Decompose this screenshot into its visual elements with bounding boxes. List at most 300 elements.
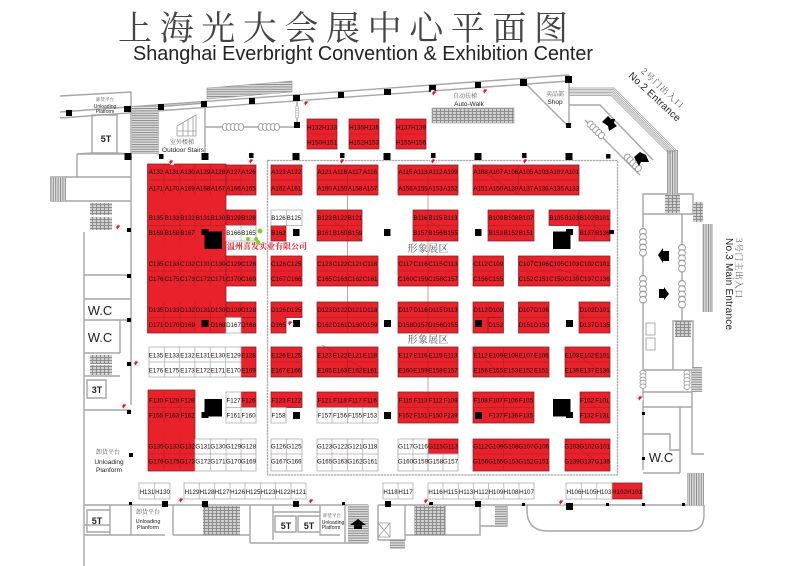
booth labels: row E: E102: [580, 352, 595, 360]
booth labels: row C: C129: [226, 261, 241, 268]
booth labels: row F: F105: [519, 398, 534, 404]
booth labels: row B lower: B165: [241, 230, 256, 237]
booth labels: row G: G113: [443, 444, 458, 450]
booth labels: row G: G122: [332, 444, 348, 450]
booth labels: row D lower: D155: [443, 322, 458, 329]
booth labels: row A lower: A135: [549, 186, 564, 192]
booth labels: row A lower: A162: [271, 186, 286, 192]
booth labels: row C: C106: [534, 261, 549, 268]
entrance label: No.3: No.3 Main Entrance: [723, 238, 734, 330]
booth labels: row D lower: D151: [519, 322, 534, 329]
booth labels: row B: B131: [196, 215, 211, 222]
booth labels: row C: C125: [287, 261, 302, 268]
booth labels: row E lower: E151: [534, 368, 549, 374]
booth labels: row C lower: C176: [149, 276, 164, 283]
booth labels: row F lower: F150: [428, 412, 443, 420]
booth labels: row B: B122: [333, 215, 348, 222]
booth labels: row D: D129: [226, 307, 241, 314]
booth labels: row G: G118: [363, 444, 378, 450]
booth labels: row D: D107: [519, 307, 534, 314]
booth labels: row A: A113: [414, 169, 428, 176]
booth labels: row F: F117: [348, 398, 362, 404]
booth labels: row F: F112: [429, 398, 443, 404]
booth labels: row E lower: E175: [165, 368, 180, 374]
booth labels: row G lower: G166: [286, 458, 302, 466]
booth labels: row D lower: D171: [149, 322, 164, 329]
booth labels: row G: G107: [518, 444, 534, 450]
booth labels: row D lower: D165: [271, 322, 286, 329]
booth labels: row G lower: G173: [180, 458, 196, 466]
room and facility labels: Unloading: [94, 104, 116, 110]
booth labels: row B: B115: [428, 215, 443, 222]
booth labels: row D lower: D159: [363, 322, 378, 329]
booth labels: row C: C109: [488, 261, 504, 268]
room and facility labels: 室外楼梯: [170, 137, 194, 146]
booth labels: row E lower: E166: [287, 368, 302, 374]
booth labels: bottom H row: H129: [185, 489, 200, 496]
booth labels: row G: G123: [317, 444, 333, 450]
booth labels: row D: D109: [488, 307, 504, 314]
booth labels: bottom H row: H123: [261, 489, 276, 496]
booth labels: row G lower: G162: [347, 458, 363, 466]
booth labels: row F lower: F131: [595, 412, 610, 420]
booth labels: row C: C107: [519, 261, 534, 268]
booth labels: row A: A132: [149, 169, 164, 176]
booth labels: row C lower: C157: [443, 276, 458, 283]
booth labels: row D: D101: [595, 307, 610, 314]
booth labels: row E lower: E136: [595, 368, 610, 374]
booth labels: row E: E117: [398, 352, 413, 360]
booth labels: row C lower: C151: [534, 276, 549, 283]
booth labels: row E lower: E173: [180, 368, 195, 374]
booth labels: row E lower: E176: [149, 368, 164, 374]
booth labels: row A lower: A157: [363, 186, 378, 192]
booth labels: row C: C121: [348, 261, 363, 268]
booth labels: bottom H row: H107: [519, 489, 534, 496]
booth labels: row E lower: E170: [226, 368, 241, 374]
booth labels: row A lower: A155: [413, 186, 428, 192]
booth labels: row E lower: E139: [565, 368, 580, 374]
booth labels: row G: G130: [210, 444, 226, 450]
booth labels: row A lower: A160: [317, 186, 332, 192]
booth labels: top H row lower: H155: [396, 140, 411, 146]
booth labels: row A lower: A151: [473, 186, 488, 192]
booth labels: row C lower: C155: [488, 276, 504, 283]
arrow: No.2 entrance inner: [634, 152, 649, 166]
booth labels: row F lower: F132: [580, 412, 595, 420]
booth labels: row D: D123: [317, 307, 333, 314]
booth labels: bottom H row: H115: [443, 489, 458, 496]
booth labels: row B: B102: [580, 215, 595, 222]
booth labels: row E lower: E155: [489, 368, 504, 374]
booth labels: row F: F116: [363, 398, 377, 404]
booth labels: row D lower: D135: [595, 322, 610, 329]
booth labels: row G: G109: [488, 444, 504, 450]
booth labels: row A lower: A171: [149, 186, 164, 192]
title: Chinese: 上海光大会展中心平面图: [118, 1, 568, 50]
booth labels: row A: A122: [287, 169, 302, 176]
booth labels: row A lower: A150: [489, 186, 504, 192]
booth labels: row C: C130: [211, 261, 226, 268]
booth labels: row G lower: G170: [226, 458, 242, 466]
booth labels: row C: C113: [443, 261, 458, 268]
booth labels: bottom H row: H131: [140, 489, 155, 496]
booth labels: row G: G115: [428, 444, 443, 450]
booth labels: row B: B113: [444, 215, 458, 222]
room and facility labels: Auto-Walk: [454, 101, 485, 108]
booth labels: row E lower: E171: [211, 368, 226, 374]
booth labels: row F lower: F155: [149, 412, 164, 420]
booth labels: row A: A126: [241, 169, 256, 176]
booth labels: row G lower: G155: [488, 458, 504, 466]
booth labels: row F: F128: [180, 398, 195, 404]
booth labels: row F lower: F151: [413, 412, 428, 420]
image display area labels: 形象展区: [408, 240, 448, 255]
booth labels: row E: E122: [333, 352, 348, 360]
booth labels: row C lower: C175: [165, 276, 180, 283]
booth labels: bottom H row: H130: [155, 489, 170, 496]
booth labels: row C lower: C150: [549, 276, 565, 283]
booth labels: row C lower: C161: [363, 276, 378, 283]
booth labels: row C: C135: [149, 261, 164, 268]
booth labels: row C: C115: [428, 261, 443, 268]
booth labels: row B: B105: [549, 215, 564, 222]
booth labels: row C lower: C162: [348, 276, 363, 283]
booth labels: row D lower: D152: [488, 322, 504, 329]
booth labels: row E: E101: [595, 352, 610, 360]
booth labels: row A: A123: [271, 169, 286, 176]
entrance label: No.2: 2号门出入口: [638, 65, 686, 111]
booth labels: row C: C118: [363, 261, 378, 268]
booth labels: row C lower: C166: [287, 276, 302, 283]
room and facility labels: Planform: [96, 467, 122, 474]
booth labels: row D lower: D157: [413, 322, 428, 329]
booth labels: row C lower: C160: [398, 276, 413, 283]
booth labels: row G lower: G137: [579, 458, 595, 466]
booth labels: bottom H row: H108: [504, 489, 519, 496]
booth labels: row E lower: E167: [271, 368, 286, 374]
booth labels: row A lower: A166: [226, 186, 241, 192]
room and facility labels: 卸货平台: [96, 447, 120, 456]
booth labels: row A lower: A133: [565, 186, 580, 192]
booth labels: row D: D128: [241, 307, 256, 314]
booth labels: row B lower: B161: [317, 230, 332, 237]
room and facility labels: 5T: [304, 521, 315, 531]
booth labels: row B lower: B157: [413, 230, 428, 237]
arrow: bottom stairs: [350, 519, 366, 529]
room and facility labels: W.C: [88, 330, 112, 345]
booth labels: bottom H row: H121: [291, 489, 306, 496]
booth labels: top H row lower: H152: [349, 140, 364, 146]
image display area labels: [408, 240, 448, 346]
booth labels: row G lower: G171: [210, 458, 226, 466]
booth labels: row F lower: F139: [443, 412, 458, 420]
booth labels: row G lower: G169: [241, 458, 257, 466]
booth labels: row F: F121: [318, 398, 332, 404]
booth labels: row E: E108: [504, 352, 519, 360]
booth labels: row D: D118: [363, 307, 378, 314]
booth labels: top H row: H136: [364, 124, 379, 132]
booth labels: row E: E130: [211, 352, 226, 360]
booth labels: row E lower: E159: [413, 368, 428, 374]
booth labels: row D lower: D161: [333, 322, 348, 329]
booth labels: row F: F102: [580, 398, 595, 404]
highlighted company label: 温州喜发实业有限公司: [227, 241, 307, 252]
booth labels: row E: E135: [149, 352, 164, 360]
booth labels: row F lower: F161: [226, 412, 241, 420]
booth labels: row B: B103: [565, 215, 580, 222]
booth labels: row B lower: B152: [504, 230, 519, 237]
booth labels: row F lower: F135: [519, 412, 534, 420]
booth labels: row G: G132: [180, 444, 196, 450]
booth labels: row G: G135: [148, 444, 164, 450]
booth labels: row A: A116: [363, 169, 378, 176]
booth labels: row A lower: A161: [287, 186, 302, 192]
booth labels: row F: F113: [414, 398, 428, 404]
booth labels: row F lower: F153: [363, 412, 378, 420]
booth labels: row A: A105: [519, 169, 534, 176]
booth labels: row E: E131: [196, 352, 211, 360]
booth labels: row E: E125: [287, 352, 302, 360]
booth labels: bottom H row: H112: [474, 489, 489, 496]
room and facility labels: 3T: [92, 385, 103, 395]
booth labels: row B lower: B155: [443, 230, 458, 237]
booth labels: row E: E113: [444, 352, 458, 360]
coil doors: [222, 106, 690, 390]
booth labels: row A: A117: [348, 169, 363, 176]
booth labels: row D: D125: [287, 307, 302, 314]
room and facility labels: Unloading: [136, 519, 160, 525]
booth labels: row D: D131: [196, 307, 211, 314]
booth labels: row C lower: C171: [211, 276, 226, 283]
booth labels: row C lower: C170: [226, 276, 241, 283]
booth labels: row C lower: C163: [333, 276, 348, 283]
booth labels: row G: G102: [579, 444, 595, 450]
room and facility labels: W.C: [649, 450, 673, 465]
booth labels: row G lower: G176: [148, 458, 164, 466]
booth labels: row D: D112: [473, 307, 488, 314]
booth labels: bottom H row: H113: [459, 489, 474, 496]
booth labels: row G: G126: [271, 444, 287, 450]
booth labels: row A: A128: [211, 169, 226, 176]
elevator box: [378, 523, 390, 537]
booth labels: row C: C117: [398, 261, 413, 268]
booth labels: top H row lower: H153: [364, 140, 379, 146]
booth labels: row B: B135: [149, 215, 164, 222]
booth labels: row B: B123: [317, 215, 332, 222]
room and facility labels: Platform: [96, 109, 114, 115]
room and facility labels: Outdoor Stairs: [162, 147, 205, 154]
booth labels: row G: G121: [347, 444, 363, 450]
booth labels: row G: G101: [595, 444, 610, 450]
booth labels: row G lower: G159: [413, 458, 429, 466]
booth labels: row B: B108: [504, 215, 519, 222]
booth labels: row G lower: G172: [195, 458, 211, 466]
booth labels: row A: A112: [428, 169, 443, 176]
room and facility labels: Platform: [322, 525, 340, 531]
booth labels: row E: E115: [428, 352, 443, 360]
booth labels: top H row lower: H156: [411, 140, 426, 146]
booth labels: row G: G112: [473, 444, 488, 450]
booth labels: row A: A108: [473, 169, 488, 176]
booth labels: row F: F101: [595, 398, 610, 404]
booth labels: row D lower: D150: [534, 322, 549, 329]
booth labels: row A: A109: [443, 169, 458, 176]
booth labels: row D: D117: [398, 307, 413, 314]
booth labels: row F lower: F157: [318, 412, 332, 420]
booth labels: row F: F126: [241, 398, 256, 404]
booth labels: row F lower: F137: [489, 412, 503, 420]
booth labels: top H row lower: H151: [322, 140, 337, 146]
booth labels: row F: F106: [504, 398, 519, 404]
room and facility labels: 卖品部: [546, 89, 564, 98]
booth labels: row G: G125: [286, 444, 302, 450]
booth labels: row B lower: B156: [428, 230, 443, 237]
booth labels: row C: C101: [595, 261, 610, 268]
booth labels: row B: B133: [165, 215, 180, 222]
booth labels: row F: F123: [271, 398, 286, 404]
booth labels: row D: D135: [149, 307, 164, 314]
booth labels: row G lower: G152: [518, 458, 534, 466]
booth labels: row C: C131: [196, 261, 211, 268]
booth labels: row F lower: F162: [180, 412, 195, 420]
booth labels: bottom H row: H126: [230, 489, 245, 496]
booth labels: row F: F108: [474, 398, 488, 404]
booth labels: row E lower: E163: [333, 368, 348, 374]
booth labels: row A: A121: [317, 169, 332, 176]
booth labels: row F: F107: [489, 398, 503, 404]
booth labels: row G: G116: [413, 444, 428, 450]
booth labels: row E: E126: [271, 352, 286, 360]
booth labels: row C: C133: [165, 261, 180, 268]
booth labels: row D: D133: [165, 307, 180, 314]
booth labels: row E: E128: [241, 352, 256, 360]
booth labels: row D: D102: [580, 307, 595, 314]
booth labels: row D: D122: [333, 307, 348, 314]
booth labels: row E: E107: [519, 352, 534, 360]
booth labels: row F lower: F136: [504, 412, 519, 420]
booth labels: row G lower: G165: [317, 458, 333, 466]
booth labels: row D lower: D169: [180, 322, 195, 329]
booth labels: row B lower: B153: [489, 230, 504, 237]
booth labels: row G: G117: [398, 444, 413, 450]
booth labels: row G: G131: [195, 444, 211, 450]
booth labels: row F: F127: [226, 398, 241, 404]
booth labels: bottom H row: H125: [246, 489, 261, 496]
room and facility labels: [88, 89, 673, 531]
booth labels: bottom H row: H117: [398, 489, 413, 496]
booth labels: row G: G108: [503, 444, 519, 450]
room and facility labels: Shop: [547, 99, 563, 106]
booth labels: row E lower: E156: [473, 368, 488, 374]
booth labels: row E lower: E169: [241, 368, 256, 374]
booth labels: row G lower: G160: [398, 458, 414, 466]
booth labels: row B: B121: [348, 215, 363, 222]
booth labels: row G lower: G139: [564, 458, 580, 466]
booth labels: row C lower: C159: [413, 276, 428, 283]
booth labels: top H row: H135: [349, 124, 364, 132]
booth labels: row E: E103: [565, 352, 580, 360]
booth labels: row A: A129: [196, 169, 211, 176]
room and facility labels: Unloading: [94, 459, 124, 466]
booth labels: row F: F118: [333, 398, 347, 404]
booth labels: row C: C128: [241, 261, 256, 268]
booth labels: row A lower: A156: [398, 186, 413, 192]
booth labels: row A lower: A152: [443, 186, 458, 192]
booth labels: row B: B130: [211, 215, 226, 222]
booth labels: row C lower: C136: [595, 276, 610, 283]
red area: left large block: [148, 164, 256, 471]
booth labels: row D lower: D158: [398, 322, 413, 329]
booth labels: row C: C132: [180, 261, 195, 268]
booth labels: row E lower: E157: [443, 368, 458, 374]
booth labels: row F lower: F163: [165, 412, 180, 420]
booth labels: bottom H row: H101: [627, 489, 642, 496]
booth labels: row E: E106: [534, 352, 549, 360]
booth labels: row F: F130: [149, 398, 164, 404]
booth labels: row E lower: E137: [580, 368, 595, 374]
booth labels: row E lower: E152: [519, 368, 534, 374]
booth labels: row D lower: D168: [211, 322, 226, 329]
booth labels: row A lower: A158: [348, 186, 363, 192]
room and facility labels: 自动扶梯: [453, 91, 477, 100]
booth labels: row A lower: A153: [428, 186, 443, 192]
booth labels: row E: E116: [414, 352, 428, 360]
green location dots: [246, 228, 262, 244]
white booths: [139, 210, 612, 499]
booth labels: row D: D132: [180, 307, 195, 314]
booth labels: row B: B129: [226, 215, 241, 222]
booth labels: row D: D126: [271, 307, 286, 314]
booth labels: row F: F115: [399, 398, 413, 404]
booth labels: row E: E129: [226, 352, 241, 360]
red blocks: [271, 119, 642, 499]
booth labels: row A lower: A159: [333, 186, 348, 192]
booth labels: row B lower: B160: [333, 230, 348, 237]
title: English: Shanghai Everbright Convention & Exhibition Center: [133, 42, 593, 65]
booth labels: row A lower: A170: [165, 186, 180, 192]
booth labels: top H row: H133: [322, 124, 337, 132]
booth labels: row G lower: G158: [428, 458, 444, 466]
booth labels: row B lower: B136: [595, 230, 610, 237]
booth labels: row C lower: C169: [241, 276, 256, 283]
booth labels: row G lower: G167: [271, 458, 287, 466]
booth labels: row B: B128: [241, 215, 256, 222]
booth labels: row A: A106: [504, 169, 519, 176]
booth labels: bottom H row: H109: [489, 489, 504, 496]
booth labels: bottom H row: H116: [428, 489, 443, 496]
room and facility labels: W.C: [88, 303, 112, 318]
booth labels: row G: G103: [564, 444, 580, 450]
booth labels: row A lower: A169: [180, 186, 195, 192]
booth labels: row B lower: B159: [348, 230, 363, 237]
booth labels: row E lower: E161: [363, 368, 378, 374]
title: [118, 1, 593, 65]
booth labels: row E lower: E172: [196, 368, 211, 374]
booth labels: row E: E118: [363, 352, 378, 360]
booth labels: row B: B109: [489, 215, 504, 222]
booth labels: row A lower: A167: [211, 186, 226, 192]
room and facility labels: 卸货平台: [96, 96, 114, 103]
booth labels: row C lower: C156: [473, 276, 489, 283]
booth labels: row D lower: D162: [317, 322, 333, 329]
booth labels: row G: G133: [164, 444, 180, 450]
booth labels: row E: E121: [348, 352, 363, 360]
booth labels: row C: C116: [413, 261, 428, 268]
stair hatching: [50, 81, 713, 549]
booth labels: row A: A101: [565, 169, 580, 176]
booth labels: row D: D116: [413, 307, 428, 314]
